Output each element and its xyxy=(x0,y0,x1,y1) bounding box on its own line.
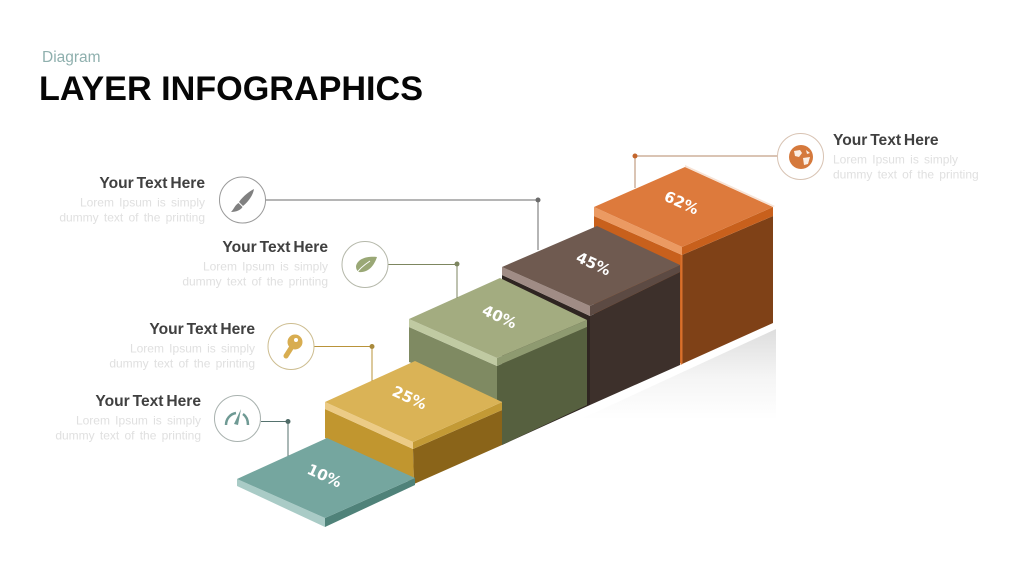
label: 25%: 25% xyxy=(389,382,429,414)
title: LAYER INFOGRAPHICS xyxy=(39,70,423,108)
text block: leaf: dummy text of the printing xyxy=(182,274,328,288)
icon: leaf xyxy=(342,242,388,288)
text block: brush: Your Text Here xyxy=(99,175,205,192)
text block: brush xyxy=(59,175,205,224)
text block: brush: dummy text of the printing xyxy=(59,210,205,224)
label: 10%: 10% xyxy=(304,460,344,492)
icon: key xyxy=(268,324,314,370)
step: 45% brown xyxy=(502,226,680,445)
step: 62% orange xyxy=(594,165,775,365)
text block: leaf: Lorem Ipsum is simply xyxy=(203,260,328,274)
text block: globe xyxy=(833,132,979,182)
text block: globe: Your Text Here xyxy=(833,132,939,149)
text block: gauge: Lorem Ipsum is simply xyxy=(76,414,201,428)
text block: globe: Lorem Ipsum is simply xyxy=(833,152,958,166)
floor shadow xyxy=(570,329,776,424)
connector: gauge xyxy=(261,419,290,456)
label: 45%: 45% xyxy=(573,248,613,280)
text block: leaf: Your Text Here xyxy=(222,239,328,256)
text block: leaf xyxy=(182,239,328,288)
label: 62%: 62% xyxy=(661,187,701,219)
connector: key xyxy=(314,344,374,381)
text block: key: dummy text of the printing xyxy=(109,356,255,370)
step: 40% olive xyxy=(409,278,587,445)
subtitle: Diagram xyxy=(42,49,101,66)
label: 40%: 40% xyxy=(479,301,519,333)
text block: gauge xyxy=(55,393,201,442)
text block: key: Lorem Ipsum is simply xyxy=(130,342,255,356)
icon: brush xyxy=(220,177,266,223)
step: 10% teal xyxy=(237,438,415,527)
text block: brush: Lorem Ipsum is simply xyxy=(80,196,205,210)
connector: leaf xyxy=(388,262,460,298)
text block: gauge: dummy text of the printing xyxy=(55,428,201,442)
icon: gauge xyxy=(214,396,260,442)
text block: gauge: Your Text Here xyxy=(95,393,201,410)
connector: globe xyxy=(632,154,777,188)
icon: globe xyxy=(778,134,824,180)
step: 25% gold xyxy=(325,361,502,484)
text block: key: Your Text Here xyxy=(149,321,255,338)
text block: globe: dummy text of the printing xyxy=(833,168,979,182)
connector: brush xyxy=(265,198,540,250)
text block: key xyxy=(109,321,255,370)
